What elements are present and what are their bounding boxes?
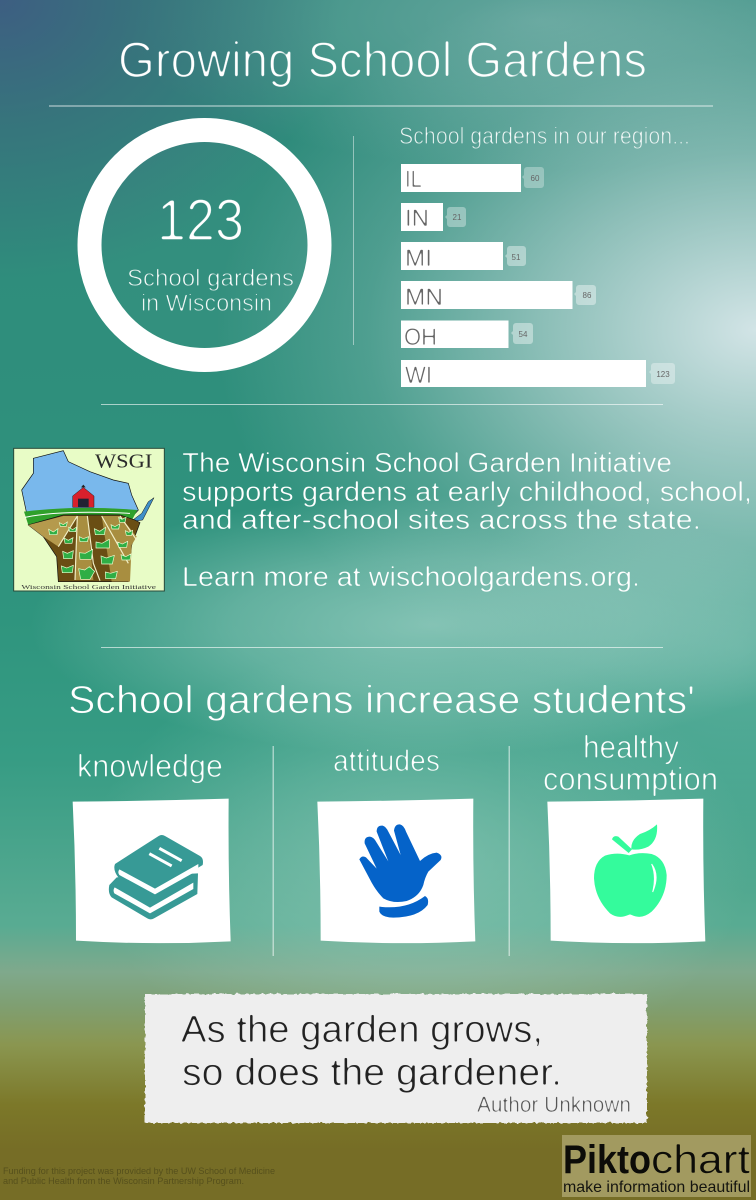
icon: WSGI logo: WSGI [95, 450, 152, 472]
funding note: Funding for this project was provided by the UW School of Medicine [3, 1166, 275, 1177]
quote text: so does the gardener. [182, 1052, 562, 1094]
icon: apple [594, 824, 667, 917]
panel: regional bar chart [399, 123, 690, 389]
funding note: and Public Health from the Wisconsin Partnership Program. [3, 1176, 244, 1187]
title: Growing School Gardens [118, 32, 647, 88]
bar MI: 51 [512, 253, 521, 262]
ring caption: in Wisconsin [141, 290, 272, 317]
quote box [145, 994, 647, 1123]
bar MN [401, 281, 596, 311]
bar WI: WI [405, 362, 432, 389]
bar IN: 21 [453, 213, 462, 222]
quote attribution: Author Unknown [477, 1092, 631, 1117]
icon: WSGI logo [14, 448, 164, 591]
bar IL [401, 164, 544, 193]
panel: Wisconsin count ring [90, 130, 320, 360]
Piktochart badge: Pikto [563, 1138, 651, 1182]
card: consumption apple [547, 799, 705, 943]
icon: waving hand [359, 824, 441, 918]
bar IL: 60 [531, 174, 540, 183]
bar IN: IN [405, 205, 429, 232]
bar OH: 54 [519, 330, 528, 339]
icon: WSGI logo: Wisconsin School Garden Initiative [21, 584, 156, 591]
text block: initiative description: The Wisconsin School Garden Initiative [182, 447, 672, 478]
label: healthy consumption [543, 729, 718, 797]
bar WI [401, 360, 675, 389]
quote text: As the garden grows, [181, 1009, 543, 1051]
chart heading: School gardens in our region... [399, 123, 690, 150]
Piktochart badge: make information beautiful [563, 1179, 750, 1196]
Piktochart badge: chart [651, 1138, 750, 1182]
bar OH [401, 320, 533, 351]
bar MI [401, 242, 526, 272]
ring [90, 130, 320, 360]
heading: benefits: School gardens increase students' [68, 679, 695, 722]
text block: initiative description: and after-school sites across the state. [182, 504, 701, 535]
bar IL: IL [405, 166, 422, 193]
label: healthy consumption: consumption [543, 761, 718, 797]
text block: initiative description: Learn more at wischoolgardens.org. [182, 561, 640, 592]
bar MN: MN [405, 284, 443, 311]
card: knowledge books [73, 799, 231, 943]
bar IN [401, 203, 466, 232]
label: attitudes: attitudes [333, 743, 440, 778]
bar MN: 86 [583, 291, 592, 300]
bar WI: 123 [656, 370, 670, 379]
label: healthy consumption: healthy [583, 729, 679, 765]
label: knowledge: knowledge [77, 748, 223, 784]
ring caption: School gardens [127, 265, 294, 292]
icon: books [109, 835, 203, 919]
bar OH: OH [404, 324, 437, 351]
big number: 123 [157, 188, 244, 253]
funding note [3, 1166, 275, 1187]
card: attitudes hand [317, 799, 475, 943]
Piktochart badge [562, 1135, 751, 1197]
text block: initiative description: supports gardens at early childhood, school, [182, 476, 752, 507]
bar MI: MI [405, 245, 432, 272]
text block: initiative description [182, 447, 752, 592]
